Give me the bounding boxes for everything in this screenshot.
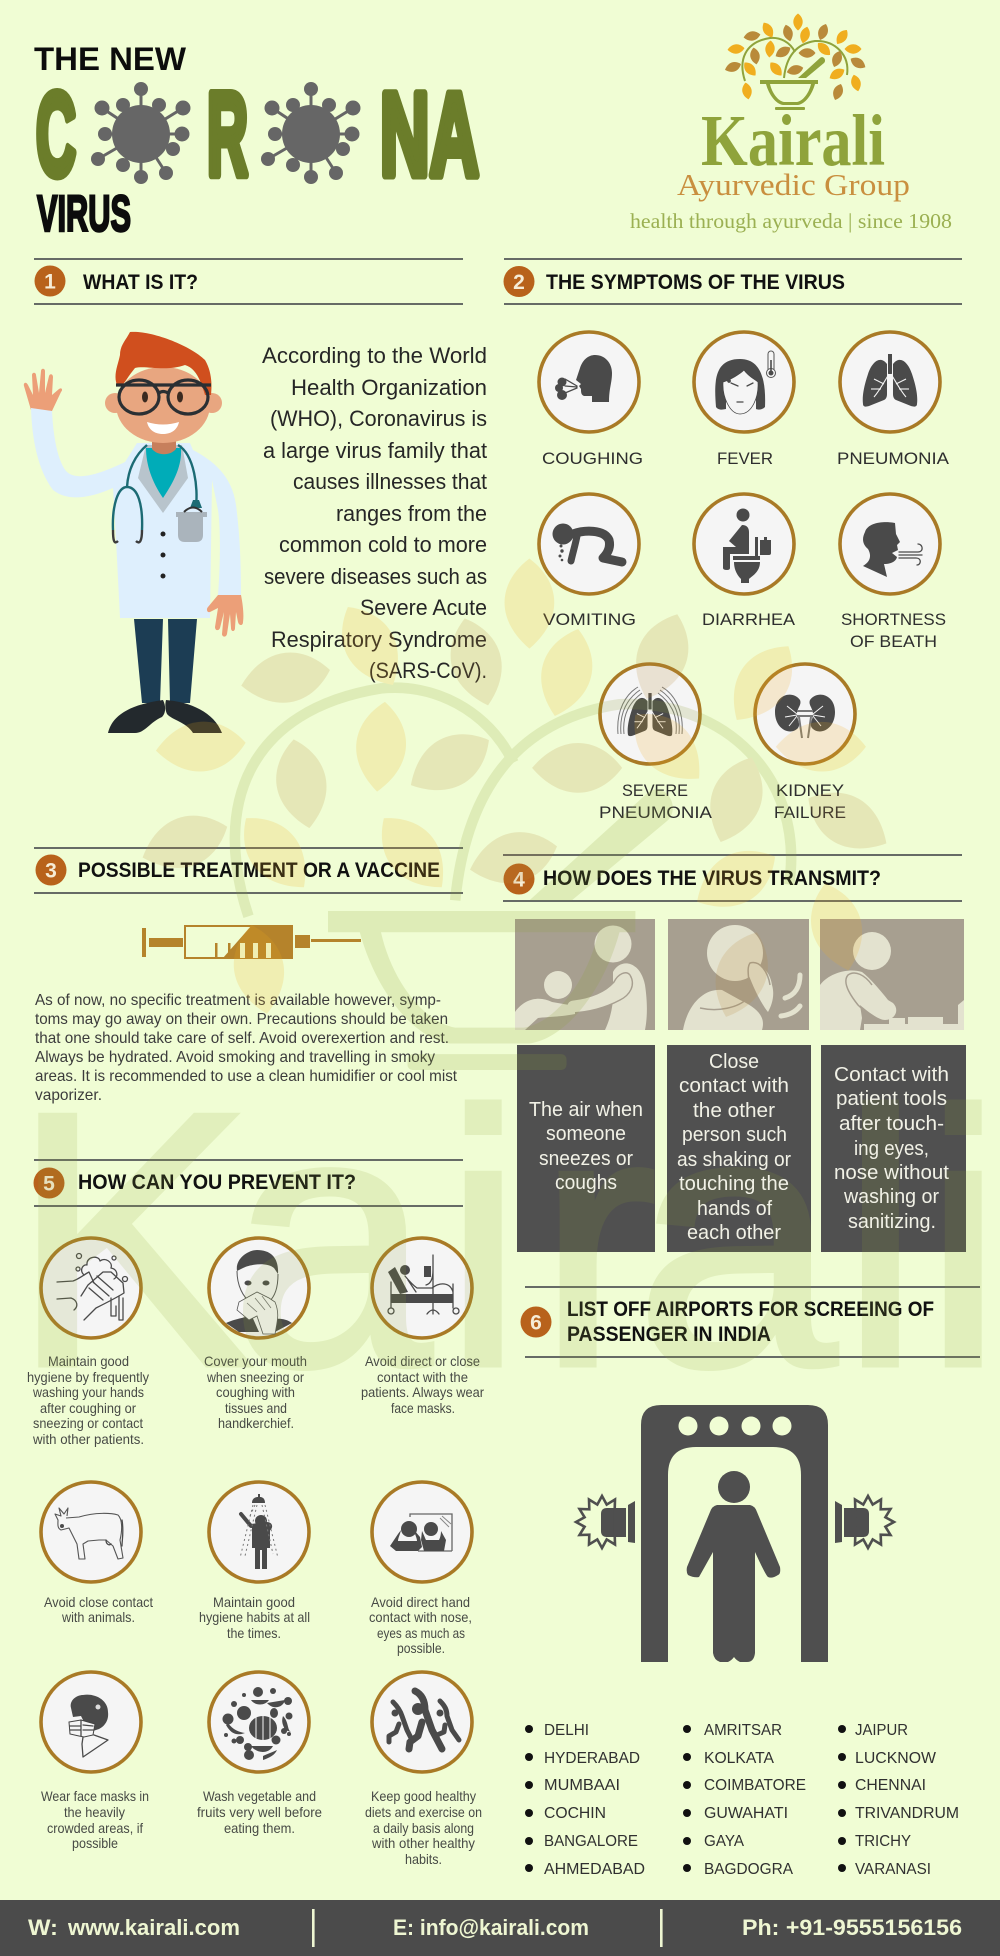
panel: treatment (34, 848, 463, 1104)
paragraph: WHO definition: causes illnesses that (293, 469, 487, 494)
text: patient tools: nose without (834, 1162, 949, 1184)
background watermark logo (11, 559, 1000, 1442)
footer (0, 1900, 1000, 1956)
symptom labels: SEVERE (622, 781, 688, 800)
icon: fever (694, 332, 794, 432)
title (34, 41, 479, 242)
text: close contact: the other (693, 1100, 775, 1122)
list of airports: GAYA (704, 1833, 744, 1850)
list of airports: GUWAHATI (704, 1805, 788, 1822)
prevention text: row 3: possible (72, 1835, 118, 1851)
prevention text: row 2: Maintain good (213, 1594, 295, 1610)
icon: severe pneumonia (600, 664, 700, 764)
icon: right scanner (835, 1496, 894, 1548)
title: VIRUS (37, 185, 131, 242)
box: air (517, 1045, 655, 1252)
prevention text: row 3: habits. (405, 1851, 442, 1867)
heading 1: WHAT IS IT? (83, 271, 198, 294)
text: close contact: touching the (679, 1173, 789, 1195)
icon: pneumonia (840, 332, 940, 432)
symptom labels: OF BEATH (850, 632, 937, 651)
paragraph: treatment: vaporizer. (35, 1087, 102, 1104)
prevention text: row 2: the times. (227, 1625, 281, 1641)
heading 2: 2 (513, 271, 525, 294)
panel: symptoms (504, 259, 962, 822)
list of airports: COIMBATORE (704, 1777, 806, 1794)
prevention text: row 1: hygiene by frequently (27, 1369, 149, 1385)
paragraph: WHO definition: common cold to more (279, 532, 487, 557)
paragraph: WHO definition: (WHO), Coronavirus is (270, 406, 487, 431)
paragraph: WHO definition: According to the World (262, 343, 487, 368)
text: air: someone (546, 1123, 626, 1145)
prevention text: row 3: crowded areas, if (47, 1820, 143, 1836)
prevention text: row 1: contact with the (377, 1369, 468, 1385)
picture: hand contact (515, 919, 655, 1030)
prevention text: row 2: Avoid direct hand (371, 1594, 470, 1610)
list of airports: TRICHY (855, 1833, 911, 1850)
paragraph: WHO definition: severe diseases such as (264, 564, 487, 589)
prevention text: row 1: Avoid direct or close (365, 1353, 480, 1369)
text: patient tools: washing or (843, 1186, 939, 1208)
prevention text: row 2 (44, 1594, 472, 1656)
footer: Ph: +91-9555156156 (742, 1915, 962, 1940)
text: close contact (677, 1051, 791, 1244)
prevention text: row 3: fruits very well before (197, 1804, 322, 1820)
icon: airport scanner gate (641, 1405, 828, 1662)
icon: cow (41, 1482, 141, 1582)
heading 3 (34, 848, 463, 893)
list of airports: AHMEDABAD (544, 1861, 645, 1878)
heading 6: 6 (530, 1312, 542, 1334)
prevention text: row 3: Wash vegetable and (203, 1788, 316, 1804)
list of airports: HYDERABAD (544, 1750, 640, 1767)
icon: vomiting (539, 494, 639, 594)
icon: coughing (539, 332, 639, 432)
prevention text: row 1: sneezing or contact (33, 1415, 143, 1431)
icon: vegetables and fruits (209, 1672, 309, 1772)
text: close contact: each other (687, 1222, 781, 1244)
prevention text: row 1: when sneezing or (206, 1369, 304, 1385)
heading 6 (520, 1287, 980, 1357)
icon: hospital bed (372, 1238, 472, 1338)
paragraph: treatment (35, 992, 458, 1104)
text: air: sneezes or (539, 1148, 633, 1170)
paragraph: treatment: Always be hydrated. Avoid smoking and travelling in smoky (35, 1049, 435, 1066)
symptom labels: FAILURE (774, 803, 846, 822)
picture: patient tools (820, 919, 964, 1030)
prevention text: row 3: eating them. (224, 1820, 295, 1836)
symptom labels: KIDNEY (776, 781, 844, 800)
icon: face mask (41, 1672, 141, 1772)
heading 5: HOW CAN YOU PREVENT IT? (78, 1171, 356, 1194)
heading 4: 4 (513, 868, 525, 892)
logo (630, 14, 952, 233)
heading 6: LIST OFF AIRPORTS FOR SCREEING OF (567, 1298, 934, 1321)
prevention text: row 1: face masks. (391, 1400, 455, 1416)
prevention text: row 1: coughing with (216, 1384, 295, 1400)
prevention text: row 3: Wear face masks in (41, 1788, 149, 1804)
text: patient tools: ing eyes, (854, 1138, 929, 1160)
heading 1 (34, 259, 463, 304)
logo: Kairali (701, 100, 885, 181)
text: patient tools: Contact with (834, 1064, 949, 1086)
panel: prevention (27, 1160, 484, 1867)
title: C (36, 69, 76, 201)
paragraph: WHO definition: Severe Acute (360, 595, 487, 620)
list of airports: TRIVANDRUM (855, 1805, 959, 1822)
heading 5: 5 (43, 1172, 55, 1196)
icon: shortness of breath (840, 494, 940, 594)
footer: W: (28, 1915, 58, 1940)
text: air (529, 1099, 643, 1194)
prevention text: row 2: contact with nose, (369, 1609, 472, 1625)
logo: Ayurvedic Group (677, 167, 910, 202)
heading 2: THE SYMPTOMS OF THE VIRUS (546, 271, 845, 294)
prevention text: row 1: after coughing or (40, 1400, 136, 1416)
title: NA (380, 69, 479, 201)
title: THE NEW (34, 41, 187, 77)
text: close contact: contact with (679, 1075, 789, 1097)
heading 4 (503, 855, 962, 901)
prevention text: row 1: Cover your mouth (204, 1353, 307, 1369)
heading 2 (504, 259, 962, 304)
prevention text: row 1: handkerchief. (218, 1415, 294, 1431)
paragraph: treatment: that one should take care of self. Avoid overexertion and rest. (35, 1030, 449, 1047)
paragraph: treatment: As of now, no specific treatment is available however, symp- (35, 992, 441, 1009)
symptom labels: SHORTNESS (841, 610, 946, 629)
background watermark logo: Kairali (11, 1036, 1000, 1442)
list of airports: CHENNAI (855, 1777, 926, 1794)
text: patient tools: after touch- (839, 1113, 944, 1135)
heading 1: 1 (44, 270, 56, 294)
footer: E: info@kairali.com (393, 1915, 589, 1940)
symptom labels: FEVER (717, 449, 773, 468)
panel: transmission (503, 855, 966, 1252)
paragraph: WHO definition: ranges from the (336, 501, 487, 526)
icon: hand washing (41, 1238, 141, 1338)
text: patient tools: sanitizing. (848, 1211, 936, 1233)
text: close contact: hands of (697, 1198, 772, 1220)
symptom labels: VOMITING (543, 610, 636, 629)
paragraph: treatment: toms may go away on their own. Precautions should be taken (35, 1011, 448, 1028)
prevention text: row 1: tissues and (225, 1400, 287, 1416)
prevention text: row 2: Avoid close contact (44, 1594, 153, 1610)
icon: exercise (372, 1672, 472, 1772)
heading 5 (34, 1160, 463, 1206)
prevention text: row 1: patients. Always wear (361, 1384, 484, 1400)
list of airports: JAIPUR (855, 1722, 908, 1739)
icon: mirror (372, 1482, 472, 1582)
symptom labels (542, 449, 950, 822)
heading 3: 3 (45, 860, 57, 882)
prevention text: row 2: with animals. (61, 1609, 135, 1625)
prevention text: row 3: a daily basis along (373, 1820, 474, 1836)
prevention text: row 2: hygiene habits at all (199, 1609, 310, 1625)
prevention text: row 3: Keep good healthy (371, 1788, 476, 1804)
text: close contact: as shaking or (677, 1149, 791, 1171)
paragraph: WHO definition: a large virus family that (263, 438, 487, 463)
text: close contact: person such (682, 1124, 787, 1146)
paragraph: WHO definition: Health Organization (291, 375, 487, 400)
list of airports: VARANASI (855, 1861, 931, 1878)
heading 4: HOW DOES THE VIRUS TRANSMIT? (543, 867, 881, 890)
paragraph: WHO definition: Respiratory Syndrome (271, 627, 487, 652)
text: air: The air when (529, 1099, 643, 1121)
paragraph: treatment: areas. It is recommended to use a clean humidifier or cool mist (35, 1068, 458, 1085)
list of airports: BAGDOGRA (704, 1861, 793, 1878)
prevention text: row 1: washing your hands (32, 1384, 144, 1400)
icon: virus 2 (261, 82, 360, 184)
prevention text: row 3 (41, 1788, 482, 1867)
picture: close contact (668, 919, 809, 1030)
prevention text: row 3: with other healthy (371, 1835, 475, 1851)
symptom labels: DIARRHEA (702, 610, 796, 629)
paragraph: WHO definition: (SARS-CoV). (369, 658, 487, 683)
prevention text: row 1: with other patients. (32, 1431, 144, 1447)
text: air: coughs (555, 1172, 617, 1194)
footer: www.kairali.com (67, 1915, 240, 1940)
icon: shower (209, 1482, 309, 1582)
heading 6: PASSENGER IN INDIA (567, 1323, 771, 1346)
list of airports: BANGALORE (544, 1833, 638, 1850)
prevention text: row 3: the heavily (64, 1804, 125, 1820)
icon: syringe (142, 925, 361, 959)
panel: what is it (24, 259, 487, 733)
icon: kidney failure (755, 664, 855, 764)
doctor illustration (24, 332, 243, 733)
list of airports: MUMBAAI (544, 1777, 620, 1794)
symptom labels: COUGHING (542, 449, 643, 468)
panel: airports (520, 1287, 980, 1878)
icon: covering mouth (209, 1238, 309, 1338)
list of airports: LUCKNOW (855, 1750, 937, 1767)
text: patient tools (834, 1064, 949, 1233)
text: close contact: Close (709, 1051, 759, 1073)
symptom labels: PNEUMONIA (599, 803, 713, 822)
list of airports: COCHIN (544, 1805, 606, 1822)
text: patient tools: patient tools (836, 1088, 947, 1110)
heading 3: POSSIBLE TREATMENT OR A VACCINE (78, 859, 440, 882)
prevention text: row 1: Maintain good (48, 1353, 129, 1369)
title: R (207, 69, 248, 201)
prevention text: row 2: eyes as much as (377, 1625, 465, 1641)
list of airports: AMRITSAR (704, 1722, 782, 1739)
list of airports: KOLKATA (704, 1750, 774, 1767)
prevention text: row 3: diets and exercise on (365, 1804, 482, 1820)
symptom labels: PNEUMONIA (837, 449, 950, 468)
prevention text: row 2: possible. (397, 1640, 445, 1656)
list of airports: DELHI (544, 1722, 589, 1739)
box: patient tools (821, 1045, 966, 1252)
icon: virus (91, 82, 190, 184)
icon: diarrhea (694, 494, 794, 594)
logo: health through ayurveda | since 1908 (630, 209, 952, 233)
list of airports (525, 1722, 959, 1878)
prevention text: row 1 (27, 1353, 484, 1447)
paragraph: WHO definition (262, 343, 487, 683)
box: close contact (667, 1045, 811, 1252)
icon: left scanner (576, 1496, 635, 1548)
